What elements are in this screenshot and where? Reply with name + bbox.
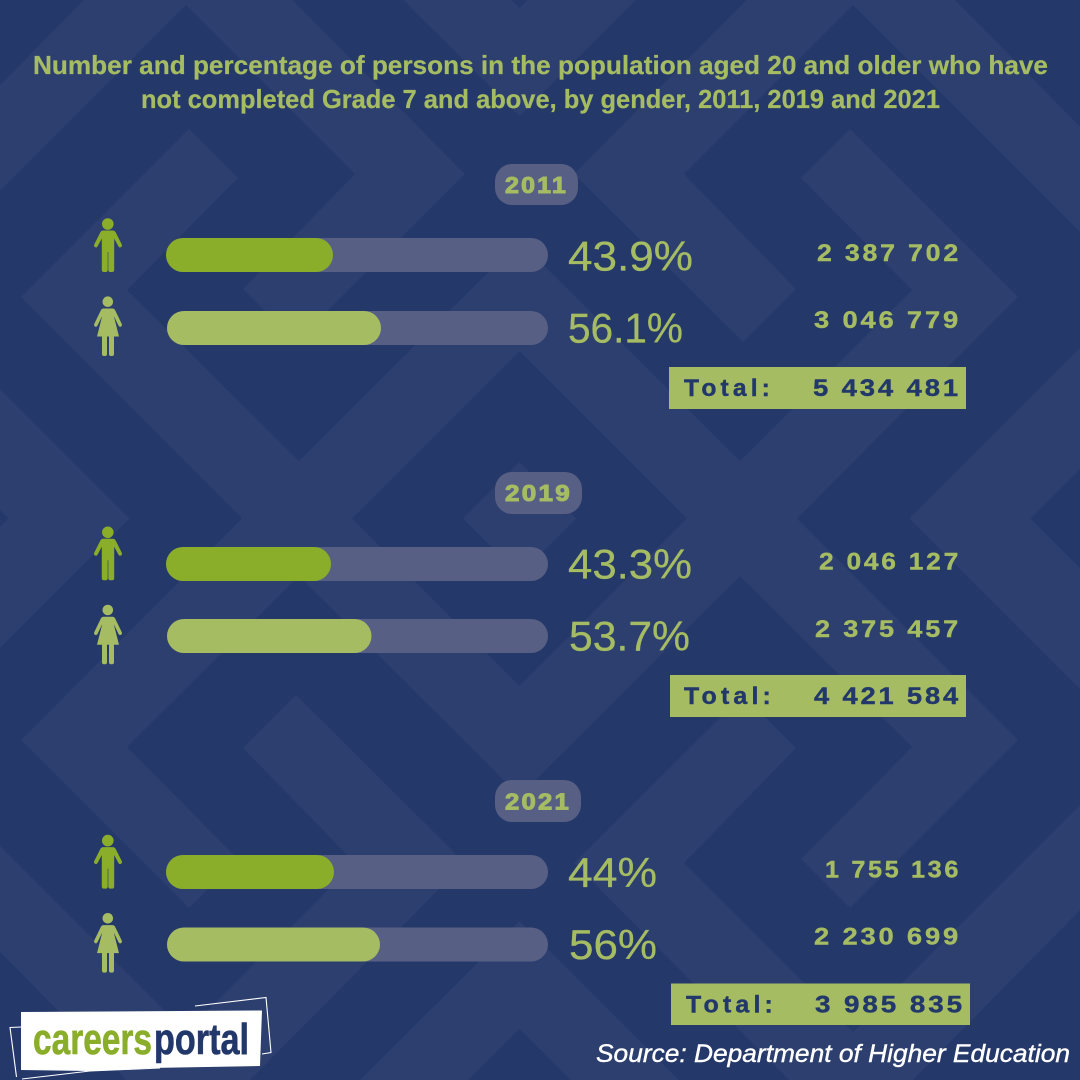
- title: not completed Grade 7 and above, by gender, 2011, 2019 and 2021: [141, 84, 940, 114]
- year label: 2019: [495, 472, 582, 514]
- panel: 2019: [94, 472, 966, 717]
- icon: woman 2021: [94, 913, 122, 973]
- total: 2019: [670, 675, 966, 717]
- icon: man 2021: [94, 835, 122, 889]
- logo: careersportal: [10, 998, 271, 1079]
- icon: man 2019: [94, 526, 122, 580]
- logo: careersportal: portal: [154, 1015, 249, 1064]
- panel: 2011: [94, 164, 966, 409]
- percentage: male 43.9%: 43.9%: [568, 232, 693, 280]
- year label: 2011: 2011: [505, 172, 568, 198]
- percentage: female 56.1%: 56.1%: [568, 304, 683, 352]
- bar: male 44%: [166, 855, 548, 889]
- total: 2011: Total:: [684, 375, 774, 402]
- year label: 2021: 2021: [505, 788, 571, 814]
- percentage: male 43.3%: 43.3%: [568, 540, 692, 588]
- count: male 2021: 1 755 136: [825, 856, 961, 884]
- bar: male 43.9%: [166, 238, 548, 272]
- count: male 2019: 2 046 127: [819, 548, 961, 575]
- percentage: male 44%: 44%: [568, 849, 657, 896]
- title: Number and percentage of persons in the population aged 20 and older who have: [33, 50, 1048, 80]
- total: 2021: Total:: [686, 992, 777, 1018]
- panel: 2021: [94, 780, 970, 1025]
- percentage: female 56%: 56%: [569, 921, 657, 968]
- count: female 2021: 2 230 699: [814, 924, 961, 951]
- total: 2021: 3 985 835: [815, 992, 965, 1018]
- bar: female 56%: [167, 928, 548, 962]
- icon: man 2011: [94, 218, 122, 272]
- bar: male 43.3%: [166, 547, 548, 581]
- bar: female 56.1%: [167, 311, 548, 345]
- total: 2019: 4 421 584: [814, 683, 961, 710]
- count: female 2011: 3 046 779: [814, 307, 961, 334]
- title: [33, 50, 1048, 114]
- total: 2021: [671, 984, 970, 1025]
- total: 2011: 5 434 481: [813, 375, 961, 402]
- bar: female 53.7%: [167, 619, 548, 653]
- total: 2019: Total:: [684, 683, 775, 710]
- year label: 2021: [495, 780, 581, 822]
- count: female 2019: 2 375 457: [815, 616, 961, 643]
- icon: woman 2019: [94, 605, 122, 664]
- percentage: female 53.7%: 53.7%: [569, 612, 690, 660]
- total: 2011: [669, 367, 966, 409]
- year label: 2011: [495, 164, 578, 205]
- year label: 2019: 2019: [505, 480, 572, 506]
- logo: careersportal: careers: [33, 1015, 152, 1064]
- source note: Source: Department of Higher Education: [596, 1040, 1070, 1068]
- icon: woman 2011: [94, 296, 122, 356]
- count: male 2011: 2 387 702: [817, 240, 961, 267]
